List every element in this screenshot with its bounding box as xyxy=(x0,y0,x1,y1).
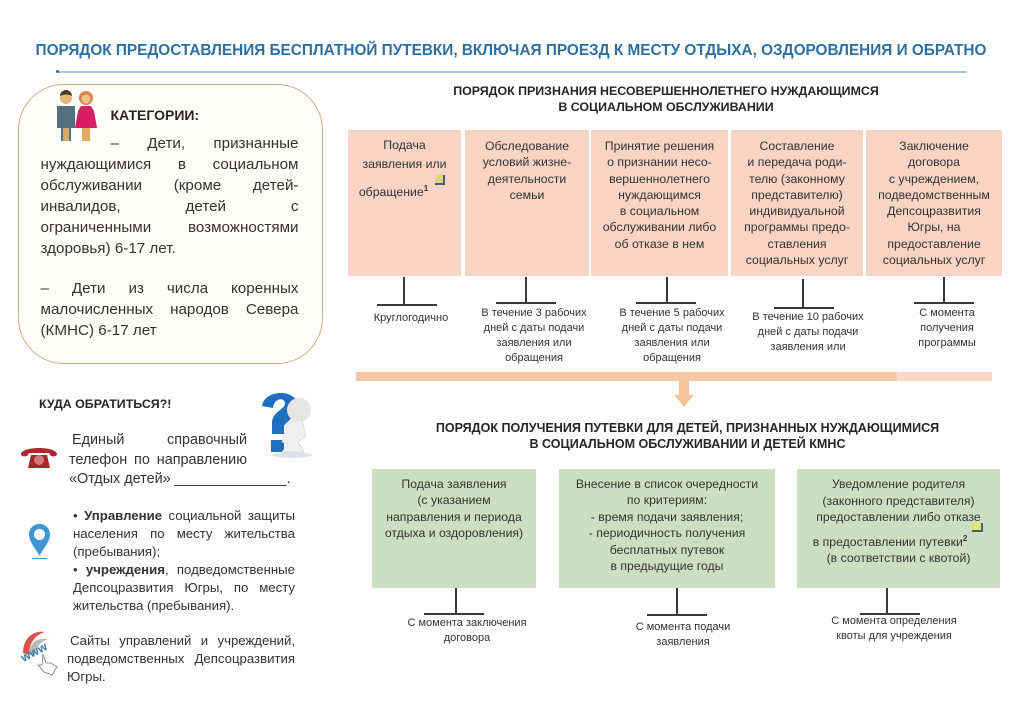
text: category one: нуждающимися в социальном xyxy=(40,156,298,172)
icon: note xyxy=(435,175,445,185)
icon: question mark figure xyxy=(262,393,312,458)
panel: step 4: представителю) xyxy=(751,188,843,202)
heading: recognition procedure: ПОРЯДОК ПРИЗНАНИЯ НЕСОВЕРШЕННОЛЕТНЕГО НУЖДАЮЩИМСЯ xyxy=(453,84,879,98)
panel: step 1 xyxy=(348,130,461,276)
panel: step 4: индивидуальной xyxy=(749,204,845,218)
deadline: step 5 xyxy=(918,307,976,349)
panel: voucher step 3: в предоставлении путевки2 xyxy=(813,534,967,549)
text: category one: здоровья) 6-17 лет. xyxy=(40,240,176,256)
panel: voucher step 2 xyxy=(559,469,775,588)
panel: voucher step 2: - время подачи заявления; xyxy=(591,510,743,524)
text: where to apply: Депсоцразвития Югры, по месту xyxy=(73,580,295,595)
panel: step 5: Югры, на xyxy=(907,220,961,234)
deadline: step 3: В течение 5 рабочих xyxy=(619,307,725,319)
connector: step 2 xyxy=(496,277,556,304)
panel: voucher step 3: Уведомление родителя xyxy=(832,477,965,491)
heading: categories: КАТЕГОРИИ: xyxy=(110,107,199,123)
deadline: voucher step 3: С момента определения xyxy=(831,615,957,627)
panel: step 4: телю (законному xyxy=(749,172,845,186)
text: category one: – Дети, признанные xyxy=(110,134,298,152)
heading: voucher procedure: ПОРЯДОК ПОЛУЧЕНИЯ ПУТЕВКИ ДЛЯ ДЕТЕЙ, ПРИЗНАННЫХ НУЖДАЮЩИМИСЯ xyxy=(436,421,939,435)
panel: step 4: социальных услуг xyxy=(746,253,848,267)
panel: voucher step 1: направления и периода xyxy=(386,510,522,524)
text: where to apply: (пребывания); xyxy=(73,544,160,559)
text: where to apply xyxy=(73,508,295,612)
arrow: down xyxy=(674,380,694,407)
heading: recognition procedure xyxy=(453,84,879,114)
text: websites: Югры. xyxy=(67,669,106,684)
text: category two: (КМНС) 6-17 лет xyxy=(40,322,157,338)
deadline: voucher step 3: квоты для учреждения xyxy=(836,630,952,642)
panel: voucher step 3: предоставлении либо отказе xyxy=(816,510,981,524)
panel: step 2: деятельности xyxy=(488,172,566,186)
text: where to apply: населения по месту жительства xyxy=(73,526,295,541)
deadline: step 5: получения xyxy=(920,322,974,334)
panel: voucher step 1: отдыха и оздоровления) xyxy=(385,526,523,540)
deadline: step 4: дней с даты подачи xyxy=(758,326,858,338)
panel: step 5: социальных услуг xyxy=(883,253,985,267)
panel: step 3: обслуживании либо xyxy=(603,220,716,234)
panel: step 5: с учреждением, xyxy=(889,172,979,186)
text: websites xyxy=(67,633,295,684)
connector: step 1 xyxy=(377,277,437,306)
deadline: step 3: заявления или xyxy=(634,337,710,349)
deadline: step 3: дней с даты подачи xyxy=(622,322,722,334)
connector: voucher step 2 xyxy=(647,588,707,616)
panel: voucher step 3: (в соответствии с квотой) xyxy=(827,551,970,565)
deadline: voucher step 1: С момента заключения xyxy=(407,617,527,629)
panel: step 2: семьи xyxy=(510,188,544,202)
connector: voucher step 3 xyxy=(860,588,920,615)
bar: orange divider xyxy=(356,372,992,381)
deadline: step 4: заявления или xyxy=(770,341,846,353)
panel: categories xyxy=(18,84,323,364)
panel: step 4: ставления xyxy=(767,237,827,251)
panel: step 5: договора xyxy=(908,155,960,169)
deadline: voucher step 2: С момента подачи xyxy=(636,621,730,633)
connector: step 5 xyxy=(914,277,974,304)
icon: note xyxy=(972,523,983,532)
panel: step 5: подведомственным xyxy=(878,188,990,202)
text: category two: – Дети из числа коренных xyxy=(40,280,298,296)
panel: step 1: заявления или xyxy=(362,157,447,171)
deadline: step 2: В течение 3 рабочих xyxy=(481,307,587,319)
deadline: voucher step 1: договора xyxy=(444,632,490,644)
deadline: step 2: обращения xyxy=(505,352,563,364)
text: category two xyxy=(40,280,298,338)
deadline: voucher step 3 xyxy=(831,615,957,642)
panel: step 3 xyxy=(591,130,728,276)
panel: step 1: Подача xyxy=(383,138,426,152)
icon: boy and girl xyxy=(57,90,97,141)
text: category one: инвалидов, детей с xyxy=(40,198,298,214)
deadline: voucher step 2 xyxy=(636,621,730,648)
deadline: step 2: дней с даты подачи xyxy=(484,322,584,334)
panel: voucher step 1: (с указанием xyxy=(417,493,491,507)
deadline: step 1: Круглогодично xyxy=(374,312,448,324)
connector: step 3 xyxy=(636,277,696,304)
connector: step 4 xyxy=(774,279,834,309)
panel: voucher step 2: по критериям: xyxy=(627,493,707,507)
panel: voucher step 2: Внесение в список очередности xyxy=(576,477,758,491)
text: websites: подведомственных Депсоцразвития xyxy=(67,651,295,666)
panel: voucher step 2: - периодичность получения xyxy=(589,526,745,540)
panel: step 5: Депсоцразвития xyxy=(887,204,981,218)
text: phone: телефон по направлению xyxy=(69,452,247,468)
deadline: step 5: С момента xyxy=(919,307,975,319)
panel: step 3: о признании несо- xyxy=(607,155,712,169)
text: where to apply: • учреждения, подведомственные xyxy=(73,562,295,577)
panel: step 5 xyxy=(866,130,1002,276)
text: phone: «Отдых детей» ______________. xyxy=(69,471,291,487)
panel: step 2 xyxy=(465,130,589,276)
deadline: voucher step 1 xyxy=(407,617,527,644)
text: category one: ограниченными возможностями xyxy=(40,218,298,236)
panel: step 2: условий жизне- xyxy=(483,155,571,169)
deadline: step 4: В течение 10 рабочих xyxy=(752,311,864,323)
text: phone xyxy=(69,432,291,487)
text: where to apply: • Управление социальной защиты xyxy=(73,508,295,523)
text: category one: обслуживании (кроме детей- xyxy=(40,176,298,194)
text: category one xyxy=(40,134,298,256)
panel: voucher step 2: в предыдущие годы xyxy=(611,559,723,573)
deadline: step 3: обращения xyxy=(643,352,701,364)
panel: step 4: и передача роди- xyxy=(747,155,847,169)
panel: step 4: Составление xyxy=(760,139,834,153)
deadline: voucher step 2: заявления xyxy=(656,636,710,648)
panel: voucher step 3 xyxy=(797,469,1000,588)
panel: step 3: нуждающимся xyxy=(618,188,701,202)
panel: step 5: Заключение xyxy=(899,139,969,153)
panel: step 5: предоставление xyxy=(887,237,981,251)
panel: step 3: вершеннолетнего xyxy=(609,172,710,186)
panel: voucher step 1: Подача заявления xyxy=(401,477,507,491)
heading: recognition procedure: В СОЦИАЛЬНОМ ОБСЛУЖИВАНИИ xyxy=(558,100,774,114)
panel: step 2: Обследование xyxy=(485,139,569,153)
panel: step 3: в социальном xyxy=(620,204,699,218)
icon: location pin xyxy=(29,524,50,560)
panel: step 1: обращение1 xyxy=(359,184,428,199)
panel: voucher step 2: бесплатных путевок xyxy=(610,543,724,557)
deadline: step 2 xyxy=(481,307,587,364)
panel: voucher step 1 xyxy=(372,469,536,588)
icon: red telephone xyxy=(21,448,57,468)
panel: voucher step 3: (законного представителя) xyxy=(822,494,975,508)
deadline: step 3 xyxy=(619,307,725,364)
title: ПОРЯДОК ПРЕДОСТАВЛЕНИЯ БЕСПЛАТНОЙ ПУТЕВКИ, ВКЛЮЧАЯ ПРОЕЗД К МЕСТУ ОТДЫХА, ОЗДОРОВЛЕНИЯ И ОБРАТНО xyxy=(36,42,986,59)
panel: step 3: об отказе в нем xyxy=(615,237,704,251)
connector: voucher step 1 xyxy=(424,588,484,615)
heading: voucher procedure xyxy=(436,420,939,451)
icon: www hand xyxy=(21,632,58,676)
text: where to apply: жительства (пребывания). xyxy=(73,598,234,612)
text: websites: Сайты управлений и учреждений, xyxy=(70,633,295,648)
text: category two: малочисленных народов Севера xyxy=(40,300,298,318)
deadline: step 4 xyxy=(752,311,864,353)
heading: voucher procedure: В СОЦИАЛЬНОМ ОБСЛУЖИВАНИИ И ДЕТЕЙ КМНС xyxy=(529,437,846,451)
panel: step 4 xyxy=(731,130,863,276)
panel: step 3: Принятие решения xyxy=(605,139,714,153)
text: phone: Единый справочный xyxy=(72,432,247,448)
panel: step 4: программы предо- xyxy=(744,220,850,234)
deadline: step 2: заявления или xyxy=(496,337,572,349)
deadline: step 5: программы xyxy=(918,337,976,349)
heading: where to apply: КУДА ОБРАТИТЬСЯ?! xyxy=(39,397,171,411)
